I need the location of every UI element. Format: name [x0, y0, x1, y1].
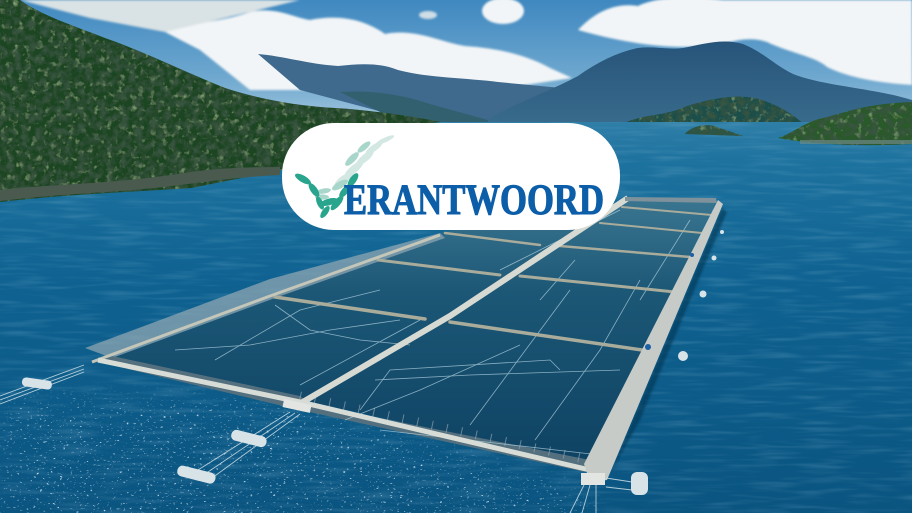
logo icon: fish forming a check mark: [295, 135, 394, 218]
left walkway: [92, 235, 440, 362]
wave glitter: [0, 370, 640, 513]
net lines: [175, 210, 690, 455]
cross walkways: [275, 207, 712, 350]
logo panel: [282, 123, 620, 230]
distant mountains: [258, 41, 912, 142]
right walkway: [584, 200, 723, 482]
front walkway: [98, 360, 590, 470]
right shadow: [612, 208, 727, 470]
sky: [0, 0, 912, 130]
pen water: [112, 200, 716, 464]
central spine: [296, 198, 628, 406]
back net fence: [85, 233, 445, 358]
right islands: [685, 102, 912, 145]
mooring buoys: [21, 230, 724, 495]
mooring lines: [0, 365, 632, 513]
forested headland: [0, 0, 441, 202]
fish farm: [85, 197, 727, 485]
sea: [0, 122, 912, 513]
corner fittings: [581, 473, 605, 485]
clouds: [20, 0, 912, 90]
